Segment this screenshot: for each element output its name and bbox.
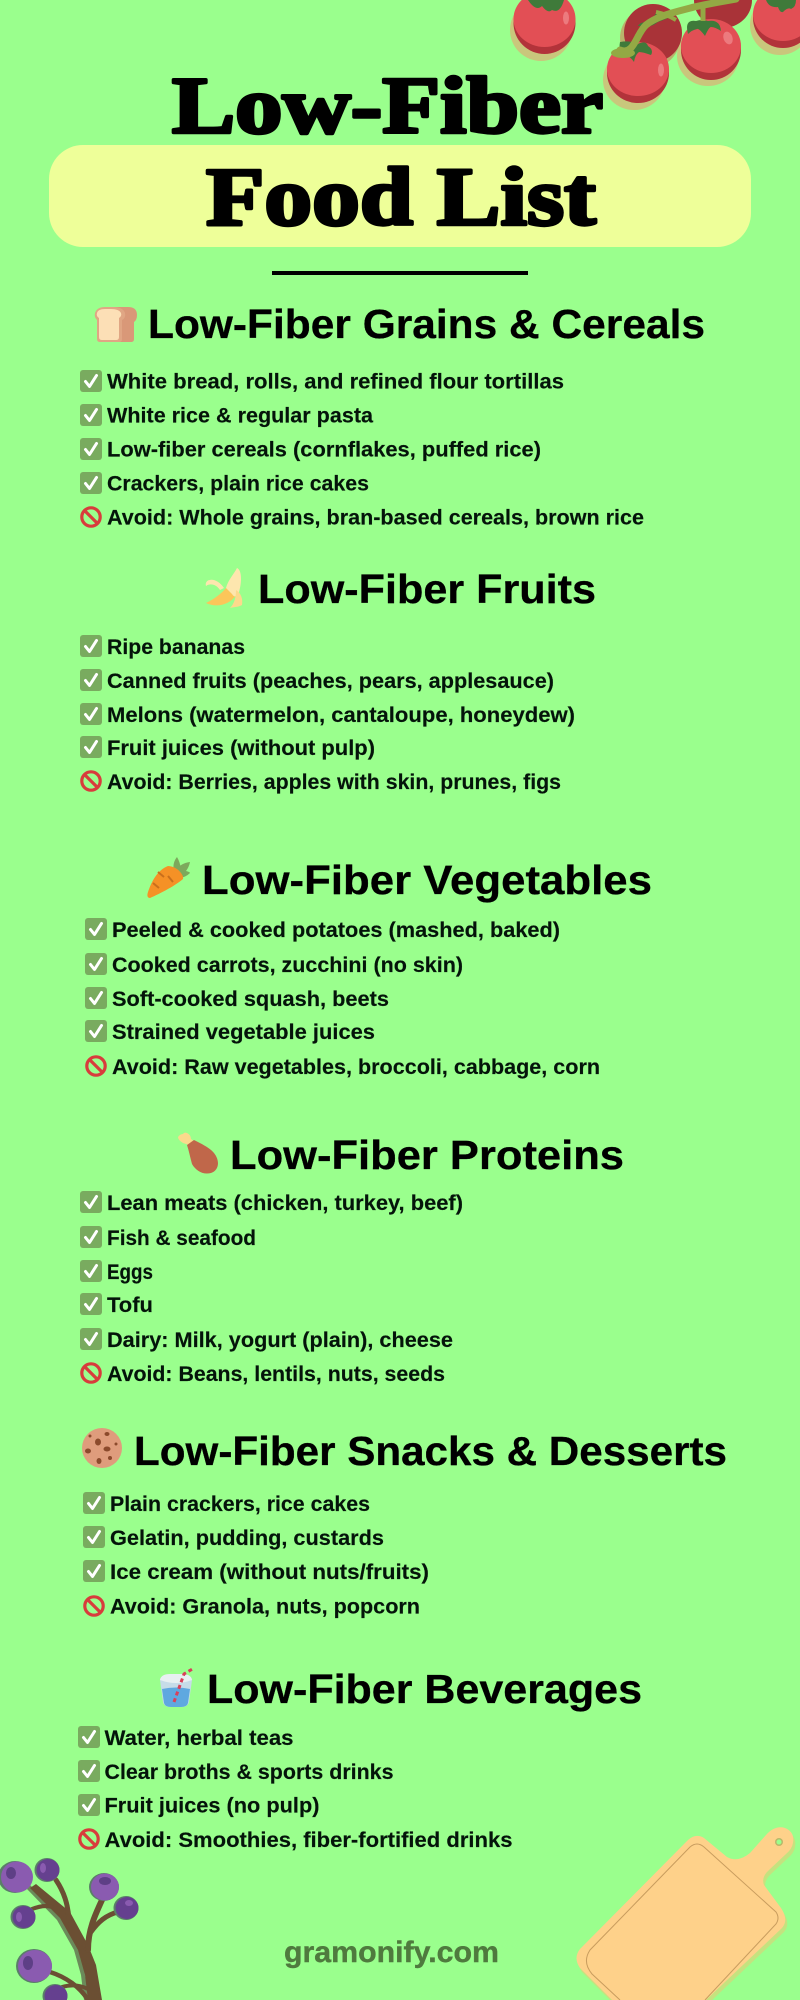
list: fruits items: Canned fruits (peaches, pears, applesauce) <box>107 669 554 693</box>
list: snacks items: Gelatin, pudding, custards <box>110 1526 384 1550</box>
footer text: gramonify.com: gramonify.com <box>284 1936 499 1969</box>
list: vegetables items: Cooked carrots, zucchini (no skin) <box>112 953 463 977</box>
list: beverages items: Clear broths & sports drinks <box>104 1760 394 1784</box>
heading: snacks: Low-Fiber Snacks & Desserts <box>134 1428 727 1474</box>
list: fruits items: Melons (watermelon, cantaloupe, honeydew) <box>107 703 575 727</box>
panel: grains and cereals <box>80 301 705 530</box>
heading: grains: Low-Fiber Grains & Cereals <box>148 301 705 347</box>
list: grains items: White rice & regular pasta <box>107 404 374 428</box>
list: vegetables items <box>85 918 600 1079</box>
list: grains items: Avoid: Whole grains, bran-based cereals, brown rice <box>107 506 644 530</box>
list: proteins items: Eggs <box>107 1260 153 1284</box>
icon: cookie <box>82 1428 122 1468</box>
panel: vegetables <box>85 857 652 1079</box>
illustration: cherry tomatoes on the vine <box>510 0 800 110</box>
panel: fruits <box>80 566 596 794</box>
list: proteins items: Tofu <box>107 1293 153 1317</box>
title: Low-Fiber: Low-Fiber <box>172 60 603 150</box>
list: fruits items: Ripe bananas <box>107 635 245 659</box>
list: beverages items: Water, herbal teas <box>104 1726 294 1750</box>
list: vegetables items: Peeled & cooked potatoes (mashed, baked) <box>112 918 560 942</box>
list: proteins items: Dairy: Milk, yogurt (plain), cheese <box>107 1328 453 1352</box>
icon: bread <box>95 307 137 342</box>
list: proteins items: Lean meats (chicken, turkey, beef) <box>107 1191 463 1215</box>
list: proteins items <box>80 1191 463 1386</box>
icon: carrot <box>147 857 190 898</box>
panel: beverages <box>78 1666 642 1852</box>
heading: vegetables: Low-Fiber Vegetables <box>202 857 652 903</box>
title pill: Food List: Food List <box>206 150 596 242</box>
list: vegetables items: Soft-cooked squash, beets <box>112 987 389 1011</box>
panel: snacks and desserts <box>82 1428 727 1618</box>
list: grains items: Crackers, plain rice cakes <box>107 472 369 496</box>
illustration: blueberry branch <box>0 1858 138 2000</box>
title pill: Food List <box>49 145 751 247</box>
icon: banana <box>206 568 242 608</box>
list: grains items: White bread, rolls, and refined flour tortillas <box>107 370 564 394</box>
heading: proteins: Low-Fiber Proteins <box>230 1132 624 1178</box>
icon: chicken drumstick <box>178 1133 218 1174</box>
illustration: cutting board <box>576 1827 795 2000</box>
list: vegetables items: Avoid: Raw vegetables, broccoli, cabbage, corn <box>112 1055 600 1079</box>
panel: proteins <box>80 1132 624 1386</box>
list: fruits items: Fruit juices (without pulp) <box>107 736 375 760</box>
list: beverages items: Avoid: Smoothies, fiber-fortified drinks <box>104 1828 513 1852</box>
list: proteins items: Avoid: Beans, lentils, nuts, seeds <box>107 1362 445 1386</box>
heading: beverages: Low-Fiber Beverages <box>207 1666 642 1712</box>
list: snacks items: Plain crackers, rice cakes <box>110 1492 370 1516</box>
list: proteins items: Fish & seafood <box>107 1226 256 1250</box>
list: beverages items: Fruit juices (no pulp) <box>104 1794 320 1818</box>
heading: fruits: Low-Fiber Fruits <box>258 566 596 612</box>
list: fruits items <box>80 635 575 794</box>
list: snacks items: Ice cream (without nuts/fruits) <box>110 1560 429 1584</box>
list: snacks items <box>83 1492 429 1618</box>
list: vegetables items: Strained vegetable juices <box>112 1020 375 1044</box>
icon: glass with straw <box>160 1668 194 1707</box>
title divider <box>272 271 528 275</box>
list: fruits items: Avoid: Berries, apples with skin, prunes, figs <box>107 770 561 794</box>
list: grains items <box>80 370 644 530</box>
list: grains items: Low-fiber cereals (cornflakes, puffed rice) <box>107 438 541 462</box>
list: beverages items <box>78 1726 513 1852</box>
list: snacks items: Avoid: Granola, nuts, popcorn <box>110 1594 420 1618</box>
